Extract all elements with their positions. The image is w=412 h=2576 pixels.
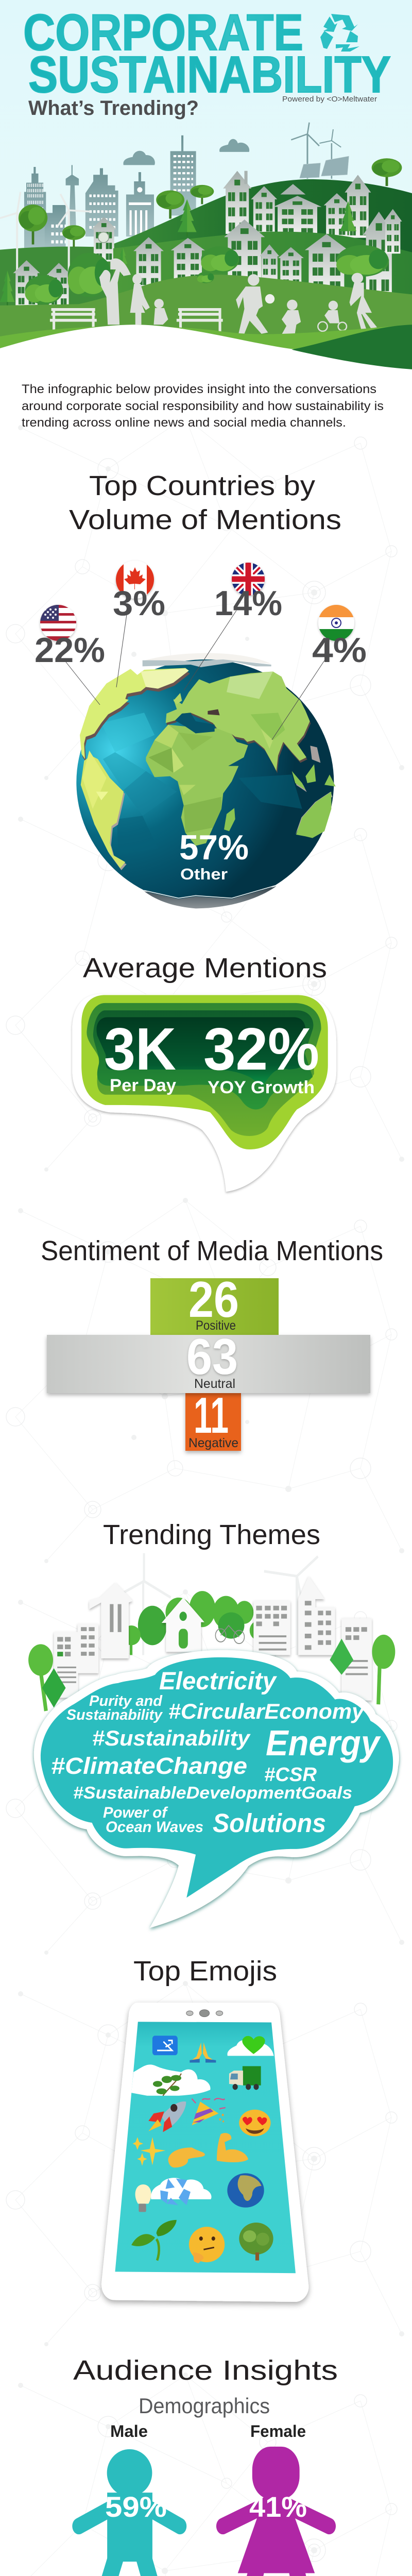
- continents: [80, 668, 189, 759]
- sky: [0, 0, 412, 371]
- heading: audience insights: Audience Insights: [73, 2355, 338, 2386]
- theme words: Ocean Waves: [106, 1819, 203, 1836]
- left buildings: [54, 1576, 372, 1701]
- heading: top countries: [69, 470, 341, 535]
- stat: 3K per day: 3K: [104, 1015, 176, 1082]
- theme words: #CircularEconomy: [168, 1699, 366, 1723]
- emoji: thinking face: [189, 2227, 225, 2263]
- flag: India: [318, 605, 354, 641]
- value: other 57%: 57%: [179, 828, 249, 867]
- icon: recycling symbol: [320, 14, 359, 52]
- bar: positive: 26: [188, 1271, 239, 1328]
- bicycle: [215, 1625, 244, 1643]
- bar: positive: Positive: [196, 1318, 236, 1333]
- emoji: earth: [227, 2173, 264, 2208]
- inland seas: [175, 713, 215, 733]
- flag: Canada: [116, 561, 154, 599]
- value: India 4%: 4%: [312, 631, 367, 670]
- distant skyline: [24, 135, 196, 250]
- intro text: trending across online news and social media channels.: [22, 416, 346, 430]
- polar ice: [143, 659, 271, 667]
- emoji: pointing hand: [168, 2147, 205, 2167]
- theme words: Energy: [266, 1723, 381, 1763]
- intro text: [22, 382, 384, 430]
- emoji: muscle: [217, 2133, 248, 2162]
- sentiment bars: [47, 1271, 370, 1451]
- subheading: demographics: Demographics: [139, 2394, 270, 2418]
- label: other: Other: [180, 865, 228, 883]
- bushes: [68, 253, 111, 297]
- clouds: [123, 139, 249, 165]
- emoji: green heart on cloud: [227, 2036, 274, 2056]
- theme words: Power of: [103, 1804, 168, 1821]
- back hill: [113, 179, 412, 289]
- themes panel: city and cloud: [28, 1553, 399, 1928]
- emoji: herb on cloud: [131, 2064, 211, 2096]
- heading: top countries: Top Countries by: [89, 470, 315, 501]
- theme words: #CSR: [264, 1764, 317, 1786]
- globe chart: [35, 561, 367, 908]
- value: Canada 3%: 3%: [113, 584, 165, 623]
- theme words: Sustainability: [66, 1707, 163, 1723]
- windows: [57, 1601, 368, 1683]
- middle houses: [133, 237, 164, 287]
- figure: female 41%: [223, 2447, 329, 2576]
- label: male: Male: [110, 2422, 148, 2441]
- figure: female 41%: 41%: [249, 2490, 307, 2523]
- left hill: [0, 247, 131, 310]
- stat: 32% YOY growth: 32%: [203, 1015, 319, 1082]
- emoji: truck: [229, 2066, 261, 2090]
- paper city: [28, 1553, 399, 1928]
- white wave: [0, 325, 412, 420]
- figure: male 59%: [79, 2449, 180, 2576]
- middle hill: [113, 232, 412, 315]
- stat: 32% YOY growth: YOY Growth: [208, 1078, 315, 1097]
- flag: USA: [40, 605, 76, 641]
- bar: neutral: Neutral: [194, 1377, 235, 1391]
- theme words: #SustainableDevelopmentGoals: [73, 1783, 352, 1802]
- heading: top countries: Volume of Mentions: [69, 504, 341, 535]
- bar: positive: [150, 1271, 279, 1335]
- emoji: seedling: [131, 2220, 177, 2261]
- emoji: recycle on cloud: [151, 2178, 212, 2205]
- background network pattern: [0, 397, 412, 1494]
- ocean facets: [101, 713, 302, 855]
- bar: negative: 11: [194, 1387, 229, 1444]
- speech bubble: average mentions: [72, 994, 336, 1192]
- value: USA 22%: 22%: [35, 631, 105, 670]
- background network pattern lower: [0, 1494, 412, 2576]
- intro text: The infographic below provides insight into the conversations: [22, 382, 376, 396]
- bar: negative: [185, 1387, 241, 1451]
- bar: neutral: 63: [186, 1328, 238, 1385]
- phone with emojis: [101, 2003, 308, 2302]
- white turbines: [0, 192, 91, 284]
- heading: sentiment: Sentiment of Media Mentions: [41, 1235, 383, 1266]
- green trees: [122, 1591, 268, 1645]
- heading: average mentions: Average Mentions: [83, 953, 327, 984]
- trees behind: [372, 158, 402, 186]
- pointer lines: [66, 611, 324, 740]
- figure: male 59%: 59%: [105, 2490, 167, 2523]
- emoji: recycling-bin sign: [152, 2036, 178, 2055]
- screen: [115, 2022, 296, 2273]
- emoji: folded hands: [190, 2042, 216, 2063]
- theme words: #Sustainability: [92, 1726, 251, 1750]
- heading: top emojis: Top Emojis: [133, 1956, 277, 1987]
- emoji: sparkles: [133, 2137, 165, 2166]
- people silhouettes: [99, 259, 377, 338]
- phone body: [101, 2003, 308, 2302]
- emoji: party popper: [192, 2098, 226, 2125]
- theme words: #ClimateChange: [51, 1753, 247, 1779]
- label: female: Female: [250, 2422, 306, 2441]
- city illustration: [0, 123, 412, 420]
- grass: [0, 325, 412, 368]
- theme words: [51, 1668, 381, 1838]
- emoji: tree: [239, 2223, 273, 2261]
- windmills: [124, 1553, 318, 1655]
- emoji: rocket: [148, 2102, 186, 2132]
- back row houses: [223, 171, 251, 234]
- globe: [76, 653, 336, 908]
- bar: negative: Negative: [188, 1436, 238, 1450]
- continent edges: [81, 671, 190, 762]
- heading: trending themes: Trending Themes: [103, 1519, 320, 1550]
- intro text: around corporate social responsibility and how sustainability is: [22, 399, 384, 413]
- benches: [50, 308, 223, 332]
- bar: neutral: [47, 1328, 370, 1393]
- land facets: [82, 671, 285, 833]
- solar panels: [300, 156, 349, 178]
- subtitle: What’s Trending?: [28, 97, 199, 120]
- powered by Meltwater: Powered by <O>Meltwater: [282, 95, 377, 104]
- camera dots: [186, 2010, 223, 2017]
- theme words: Solutions: [213, 1808, 326, 1838]
- stat: 3K per day: Per Day: [110, 1076, 176, 1095]
- side trees: [28, 1635, 395, 1676]
- theme words: Electricity: [159, 1668, 277, 1695]
- wind turbines far: [291, 123, 341, 179]
- title: Corporate Sustainability: CORPORATE: [23, 4, 303, 61]
- central house: [162, 1598, 204, 1652]
- value: UK 14%: 14%: [214, 584, 282, 623]
- cloud teal inner: [41, 1657, 393, 1897]
- flag: UK: [232, 563, 265, 596]
- emoji: bulb: [135, 2184, 151, 2212]
- cloud white outer: [34, 1650, 399, 1928]
- emoji: heart eyes: [239, 2110, 271, 2136]
- clock tower: [92, 217, 116, 262]
- dark green corner hill: [291, 325, 412, 369]
- title: Corporate Sustainability: [23, 4, 391, 104]
- front hill: [0, 275, 412, 368]
- theme words: Purity and: [89, 1693, 163, 1709]
- header scene panel: [0, 0, 412, 420]
